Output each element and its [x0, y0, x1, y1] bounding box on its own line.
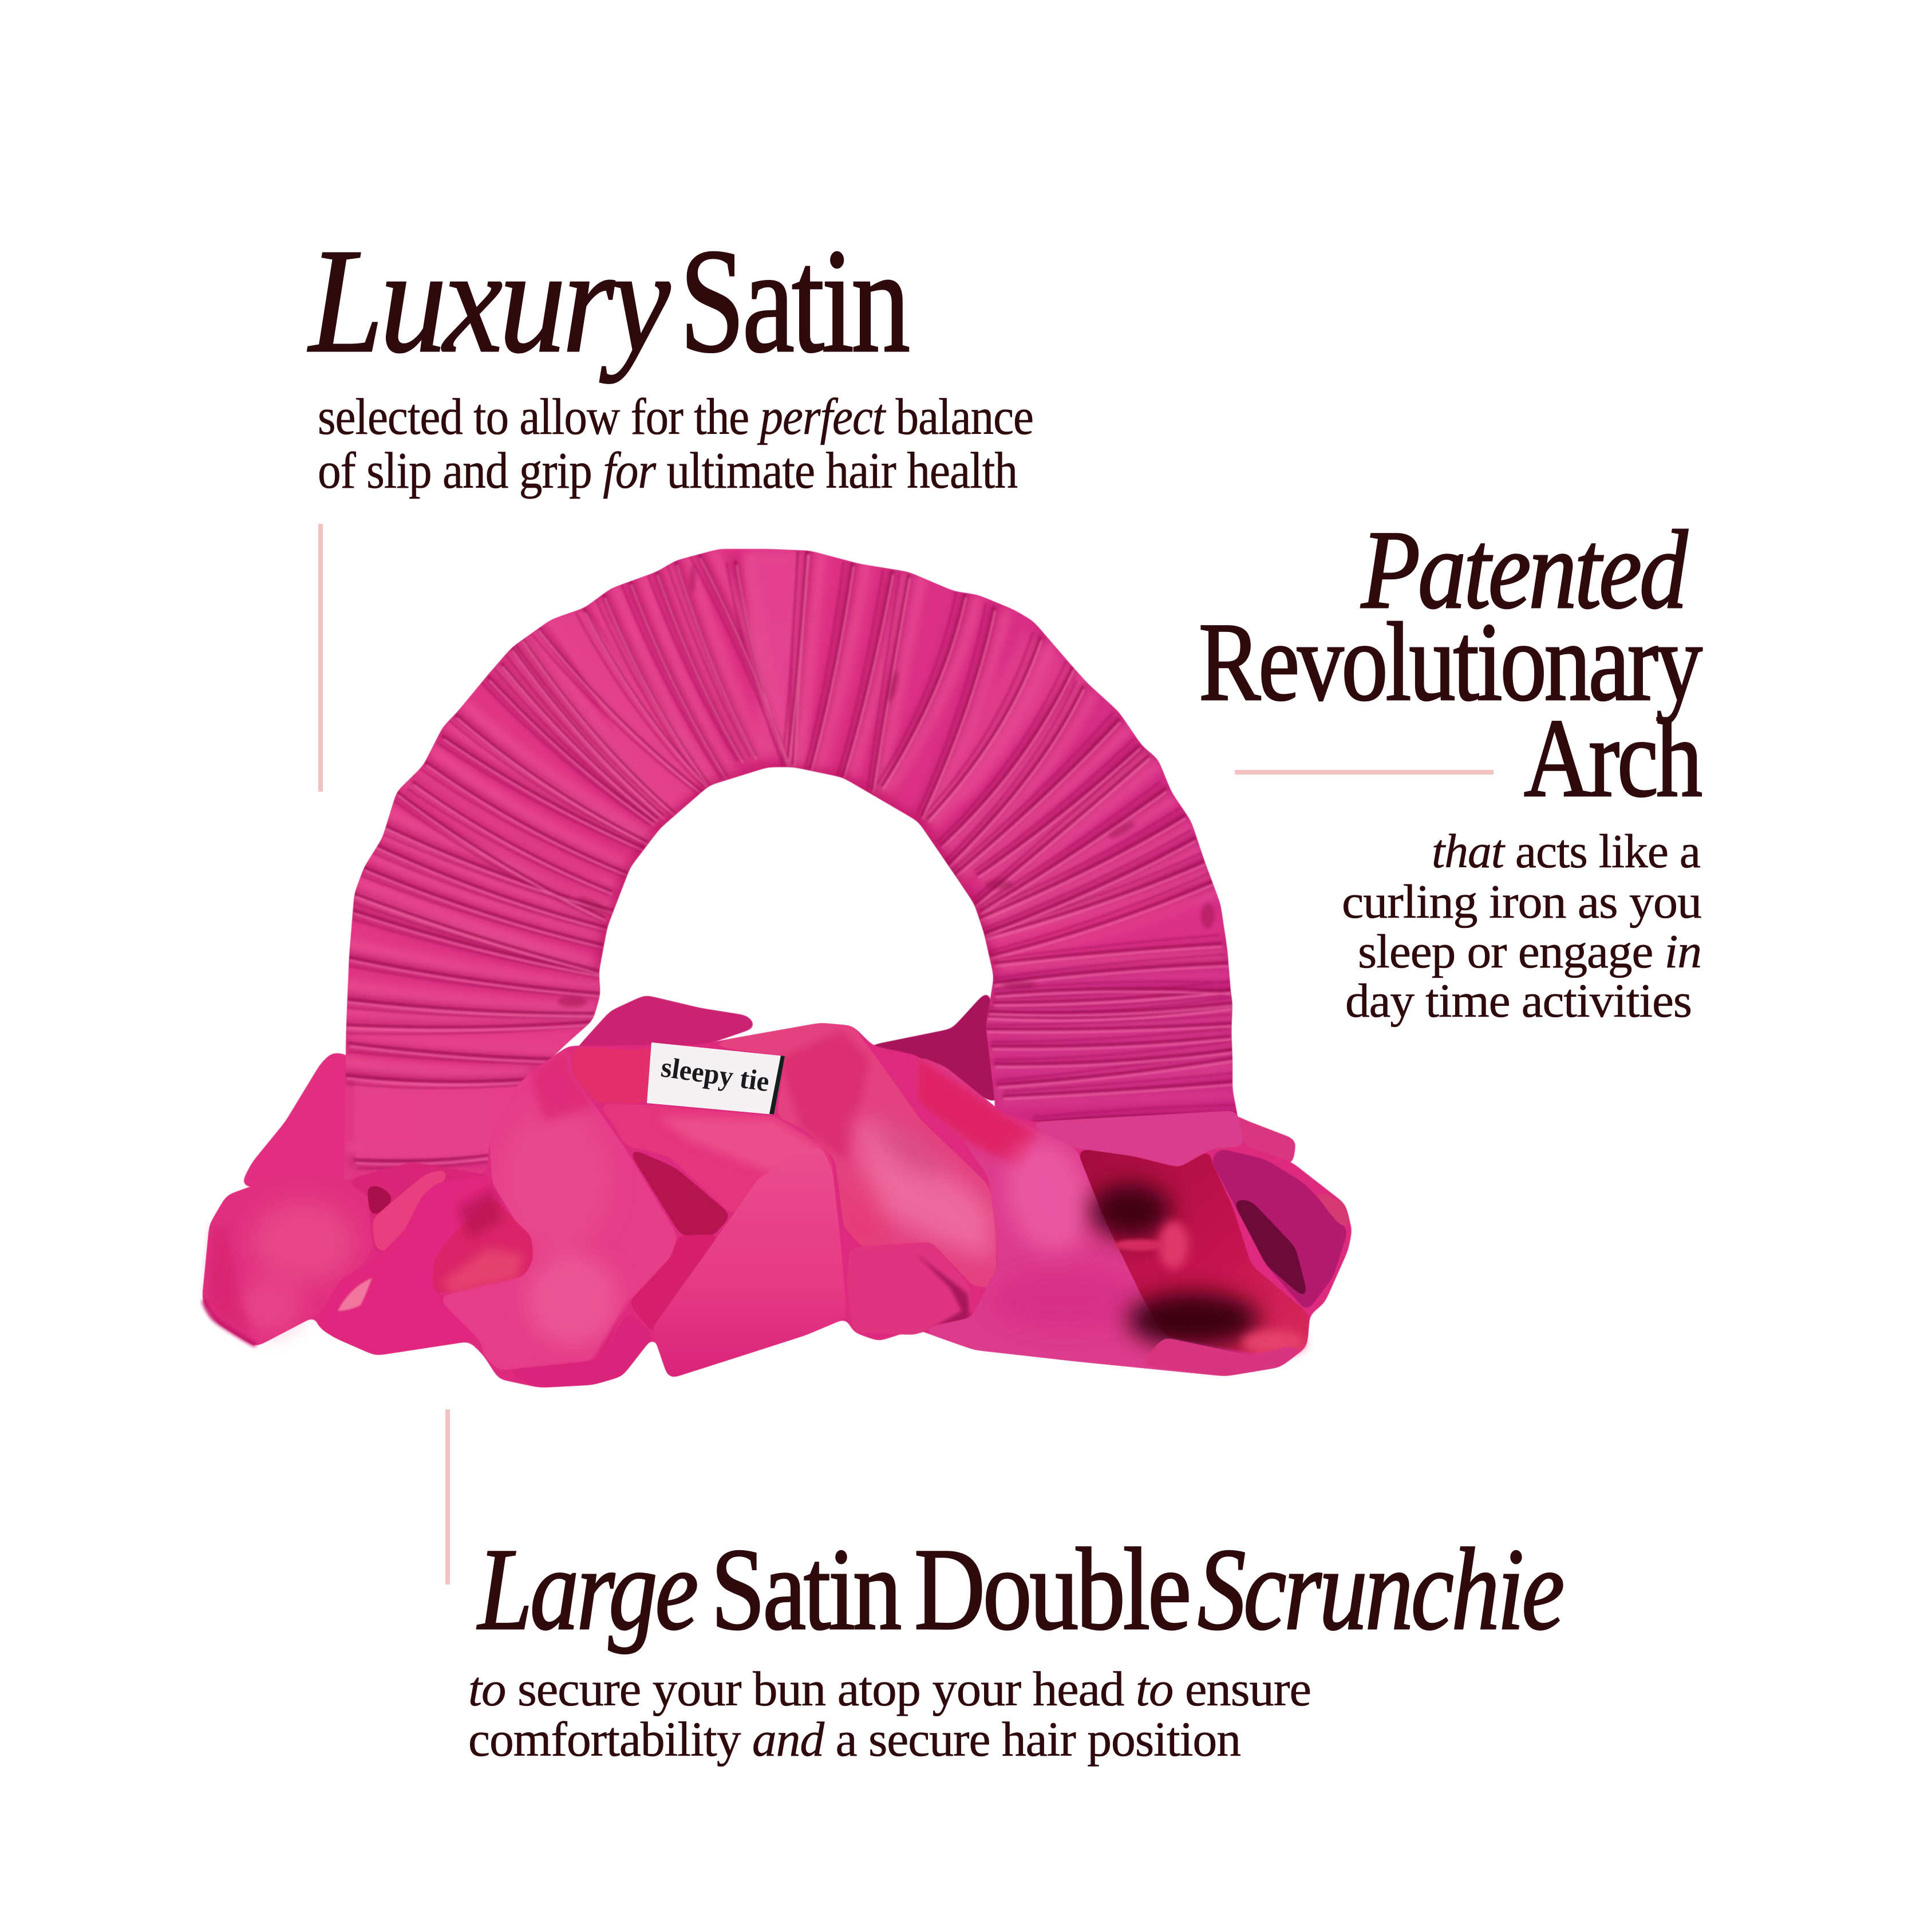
knot under arch — [343, 1162, 492, 1259]
cavity ledge — [1114, 1239, 1164, 1251]
right satin band — [910, 1048, 1265, 1385]
soft highlight shading — [343, 540, 1250, 1173]
product photo: pink satin arch with double scrunchie — [202, 540, 1352, 1391]
flat band mid left — [396, 757, 538, 875]
arch tube with gathered ribs — [337, 540, 1250, 1208]
fine rib highlights — [347, 555, 1238, 1164]
text block: Luxury Satin description — [318, 389, 1033, 499]
left puff — [202, 1178, 373, 1347]
inner red hollow — [433, 1188, 534, 1295]
highlight streak — [853, 1116, 993, 1259]
right lower magenta shading — [985, 967, 1239, 1145]
fold top tint — [531, 1046, 595, 1122]
second lobe — [317, 1175, 515, 1356]
right rim lobe — [1211, 1148, 1352, 1312]
heading: Patented Revolutionary Arch: Arch — [1524, 696, 1701, 820]
heading: Patented Revolutionary Arch — [1199, 508, 1702, 820]
right shine — [922, 630, 1076, 819]
text block: Luxury Satin description: of slip and grip for ultimate hair health — [318, 442, 1017, 499]
band bright centre — [994, 1131, 1101, 1262]
text block: Scrunchie description: comfortability and a secure hair position — [468, 1712, 1240, 1767]
text block: Scrunchie description — [468, 1661, 1311, 1767]
back flap right — [1231, 1111, 1297, 1165]
text block: Arch description: curling iron as you — [1342, 875, 1701, 929]
fold bottom tint — [492, 1288, 687, 1385]
dark cavity — [1076, 1148, 1310, 1355]
puff lower edge — [204, 1300, 256, 1345]
puff lower highlight — [238, 1279, 301, 1331]
connector line: Scrunchie — [445, 1409, 450, 1585]
back fabric left of label — [572, 995, 758, 1059]
text block: Scrunchie description: to secure your bun atop your head to ensure — [468, 1661, 1311, 1716]
upper dark pool — [1091, 1183, 1171, 1238]
puff left facet — [207, 1225, 252, 1337]
band top red — [916, 1055, 1036, 1168]
heading: Large Satin Double Scrunchie: Double — [914, 1524, 1189, 1654]
text block: Arch description: that acts like a — [1432, 825, 1701, 878]
text block: Arch description: sleep or engage in — [1358, 925, 1701, 978]
fold shine centre — [498, 1105, 613, 1254]
satin sweep right of label — [687, 1019, 1008, 1294]
bottom rim beneath large fold — [499, 1311, 654, 1388]
shine under label — [658, 1116, 824, 1174]
rose shadow — [870, 1116, 951, 1185]
cavity red shine — [1159, 1221, 1188, 1269]
brand label: sleepy tie — [647, 1042, 785, 1115]
cavity lip highlight — [1242, 1330, 1305, 1355]
soft dark rib shading — [346, 552, 1237, 1161]
hollow shadow — [458, 1188, 504, 1239]
connector line: Patented Arch — [1235, 770, 1494, 775]
lower panel — [847, 1242, 973, 1335]
pucker shadows — [558, 564, 1215, 1007]
heading: Patented Revolutionary Arch: Revolutionary — [1199, 600, 1702, 724]
bottom hem — [1139, 1337, 1307, 1376]
puff highlight — [252, 1202, 355, 1282]
scrunchie base silhouette — [202, 1023, 1352, 1388]
red zone below crease — [628, 1234, 721, 1335]
heading: Luxury Satin: Luxury — [307, 218, 671, 384]
heading: Large Satin Double Scrunchie — [476, 1524, 1563, 1654]
rim right lighter — [1304, 1183, 1352, 1230]
inner-edge shade — [599, 767, 994, 976]
right highlight band — [990, 893, 1225, 962]
text block: Arch description — [1342, 825, 1701, 1028]
plate beneath right leg — [1003, 1111, 1245, 1168]
secondary rib creases — [337, 543, 1239, 1170]
fine rib creases — [346, 552, 1237, 1161]
brand label: sleepy tie: sleepy tie — [659, 1050, 771, 1097]
hollow shine — [441, 1248, 524, 1295]
lobe inner crease — [338, 1278, 372, 1311]
band mid tone — [990, 1271, 1139, 1328]
heading: Large Satin Double Scrunchie: Large — [476, 1524, 697, 1654]
top highlight — [744, 551, 804, 764]
large fold left of label — [429, 1042, 687, 1391]
heading: Luxury Satin — [307, 218, 910, 384]
back fabric right — [859, 987, 999, 1105]
upper right tone — [779, 1030, 870, 1162]
heading: Patented Revolutionary Arch: Patented — [1360, 508, 1688, 632]
back flap left — [240, 1052, 366, 1196]
knot pink curl — [372, 1168, 452, 1254]
text block: Arch description: day time activities — [1345, 974, 1692, 1028]
warm spot — [850, 1179, 879, 1248]
satin behind label, left — [572, 1042, 651, 1103]
knot dark hollow — [366, 1184, 395, 1219]
lower dark pool — [1128, 1292, 1259, 1347]
lower left flat bands — [354, 1081, 527, 1160]
panel dark crease — [916, 1254, 970, 1331]
heading: Large Satin Double Scrunchie: Scrunchie — [1198, 1524, 1563, 1654]
lower central lobe — [651, 1145, 847, 1379]
infographic canvas — [199, 251, 1703, 1767]
heading: Large Satin Double Scrunchie: Satin — [711, 1524, 900, 1654]
connector line: Luxury Satin — [318, 524, 323, 792]
dark crease left — [625, 1145, 732, 1335]
heading: Luxury Satin: Satin — [679, 218, 910, 384]
fold under label — [596, 1103, 836, 1215]
fold shine lower — [527, 1254, 618, 1345]
text block: Luxury Satin description: selected to allow for the perfect balance — [318, 389, 1033, 445]
flat band upper left — [550, 610, 709, 815]
rim inner dark — [1231, 1198, 1310, 1303]
